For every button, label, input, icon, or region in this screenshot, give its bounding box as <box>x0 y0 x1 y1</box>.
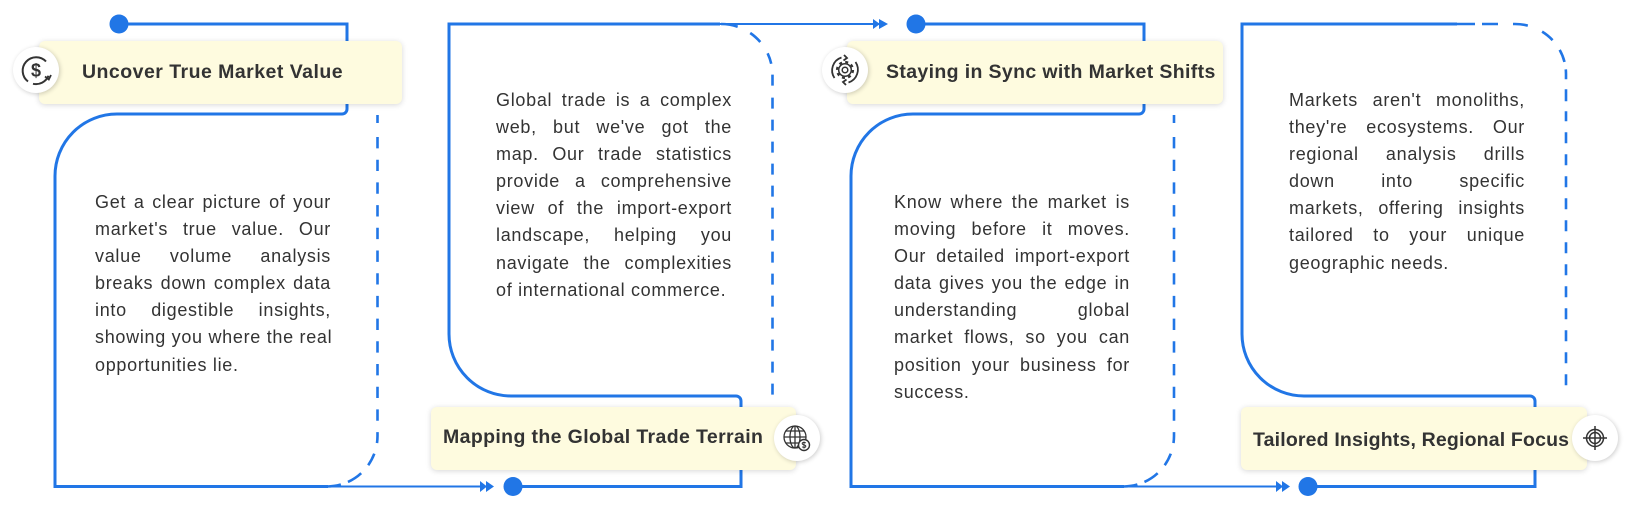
connector lines: panel 2 <box>448 19 888 496</box>
text block: trade statistics: Global trade is a complex <box>496 90 732 110</box>
heading: Tailored Insights, Regional Focus <box>1241 406 1587 470</box>
icon: globe with dollar <box>774 415 820 461</box>
connector lines: panel 3 <box>850 14 1290 492</box>
text block: trade statistics: of international commerce. <box>496 280 726 300</box>
text block: value analysis: breaks down complex data <box>95 273 331 293</box>
text block: regional analysis: markets, offering insights <box>1289 198 1525 218</box>
icon: dollar cycle: $ <box>31 60 41 80</box>
text block: regional analysis: Markets aren't monoliths, <box>1289 90 1525 110</box>
text block: trade statistics: map. Our trade statistics <box>496 144 732 164</box>
text block: value analysis: opportunities lie. <box>95 355 239 375</box>
text block: trade statistics: web, but we've got the <box>496 117 732 137</box>
text block: trade statistics: landscape, helping you <box>496 225 732 245</box>
text block: trade statistics: navigate the complexities <box>496 253 732 273</box>
panel: staying in sync with market shifts <box>821 14 1290 492</box>
heading: Staying in Sync with Market Shifts <box>846 41 1223 104</box>
panel: mapping the global trade terrain <box>429 19 888 496</box>
connector lines: panel 1 <box>54 14 494 492</box>
text block: market movement <box>894 192 1130 402</box>
text block: market movement: Know where the market is <box>894 192 1130 212</box>
text block: value analysis: showing you where the real <box>95 327 332 347</box>
connector lines: panel 4 <box>1240 22 1568 496</box>
text block: regional analysis: down into specific <box>1289 171 1525 191</box>
panel: tailored insights, regional focus <box>1239 22 1621 496</box>
text block: market movement: market flows, so you can <box>894 327 1130 347</box>
text block: trade statistics: provide a comprehensive <box>496 171 732 191</box>
text block: regional analysis <box>1289 90 1525 273</box>
heading: Uncover True Market Value <box>39 41 402 104</box>
text block: market movement: understanding global <box>894 300 1130 320</box>
panel: uncover true market value <box>12 14 494 492</box>
text block: trade statistics <box>496 90 732 300</box>
text block: value analysis: market's true value. Our <box>95 219 331 239</box>
icon: dollar cycle <box>13 47 59 93</box>
text block: regional analysis: geographic needs. <box>1289 253 1449 273</box>
text block: value analysis <box>95 192 332 375</box>
text block: market movement: data gives you the edge in <box>894 273 1130 293</box>
text block: trade statistics: view of the import-export <box>496 198 732 218</box>
heading: Tailored Insights, Regional Focus: Tailored Insights, Regional Focus <box>1253 428 1569 450</box>
heading: Staying in Sync with Market Shifts: Staying in Sync with Market Shifts <box>886 61 1216 83</box>
icon: gear cycle <box>822 47 868 93</box>
text block: market movement: success. <box>894 382 970 402</box>
text block: value analysis: value volume analysis <box>95 246 331 266</box>
text block: regional analysis: regional analysis drills <box>1289 144 1525 164</box>
icon: target crosshair <box>1572 415 1618 461</box>
heading: Mapping the Global Trade Terrain <box>430 406 796 470</box>
text block: regional analysis: tailored to your unique <box>1289 225 1525 245</box>
text block: value analysis: into digestible insights, <box>95 300 331 320</box>
heading: Mapping the Global Trade Terrain: Mapping the Global Trade Terrain <box>443 426 763 448</box>
text block: regional analysis: they're ecosystems. Our <box>1289 117 1525 137</box>
text block: market movement: moving before it moves. <box>894 219 1130 239</box>
heading: Uncover True Market Value: Uncover True Market Value <box>82 61 343 83</box>
text block: value analysis: Get a clear picture of your <box>95 192 331 212</box>
text block: market movement: Our detailed import-export <box>894 246 1130 266</box>
text block: market movement: position your business for <box>894 355 1130 375</box>
